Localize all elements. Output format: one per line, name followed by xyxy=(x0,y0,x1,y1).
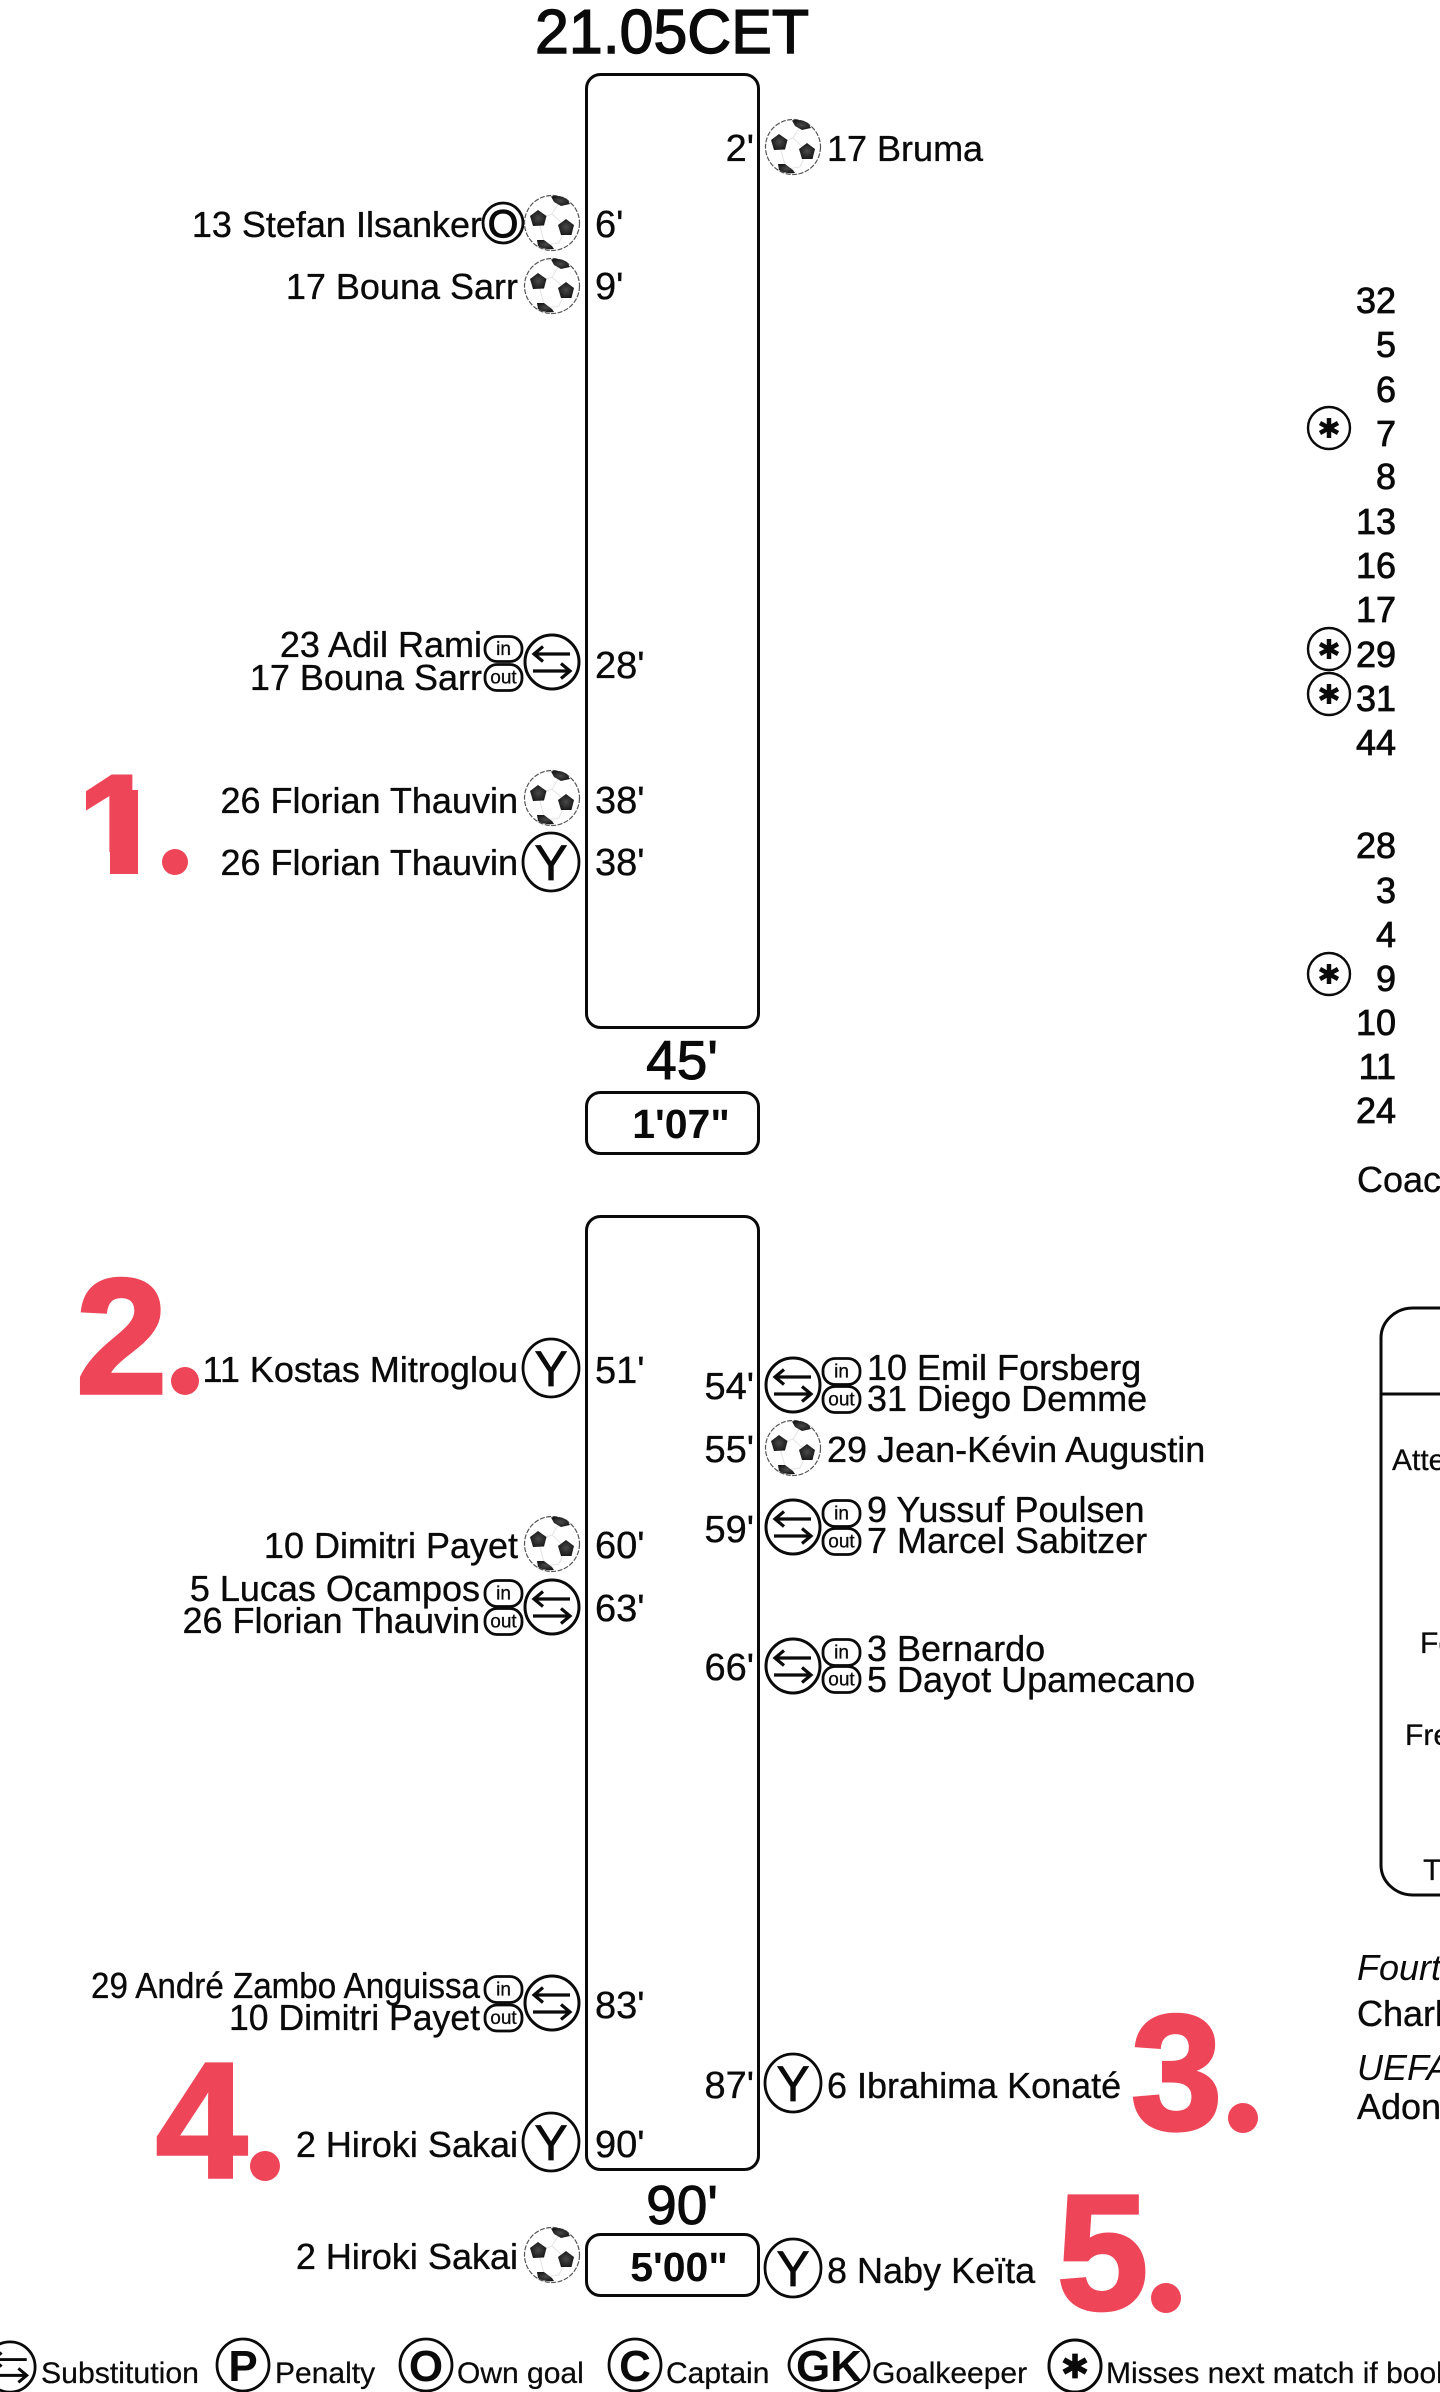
event: 28 minutes substitution xyxy=(250,624,645,698)
event: 6 minutes own goal Ilsanker: 6' xyxy=(595,204,623,246)
event: 66 minutes substitution: 3 Bernardo xyxy=(867,1628,1045,1669)
event: 66 minutes substitution: 5 Dayot Upamecano xyxy=(867,1659,1195,1700)
event: 55 minutes goal Augustin xyxy=(704,1420,1205,1476)
callout: red number 4: 4 xyxy=(156,2029,247,2212)
event: 28 minutes substitution: 23 Adil Rami xyxy=(280,624,482,665)
event: 54 minutes substitution xyxy=(704,1347,1147,1419)
legend: Own goal xyxy=(457,2357,584,2390)
event: 90 minutes yellow card Sakai xyxy=(296,2113,645,2171)
event: 60 minutes goal Payet: 10 Dimitri Payet xyxy=(264,1525,518,1566)
event: 87 minutes yellow card Konaté: 6 Ibrahima Konaté xyxy=(827,2065,1121,2106)
label: 90 minutes: 90' xyxy=(646,2174,718,2236)
text block: fourth official xyxy=(1357,1947,1440,2034)
panel: squad numbers, substitutes: 10 xyxy=(1356,1002,1396,1043)
legend: Goalkeeper xyxy=(872,2357,1027,2390)
event: 66 minutes substitution: 66' xyxy=(704,1647,754,1689)
panel: squad numbers, substitutes: 11 xyxy=(1359,1046,1396,1087)
panel: squad numbers, starters xyxy=(1356,280,1396,763)
event: 90 minutes yellow card Sakai: 90' xyxy=(595,2124,645,2166)
event: 63 minutes substitution: out xyxy=(490,1612,517,1632)
event: 87 minutes yellow card Konaté: Y xyxy=(776,2056,810,2112)
event: 2 minutes goal Bruma: 2' xyxy=(726,128,754,170)
event: 38 minutes goal Thauvin: 26 Florian Thauvin xyxy=(220,780,518,821)
event: 83 minutes substitution: out xyxy=(490,2008,517,2029)
event: 6 minutes own goal Ilsanker xyxy=(192,196,623,250)
event: 59 minutes substitution xyxy=(704,1489,1147,1561)
event: added time goal Sakai xyxy=(296,2228,580,2282)
event: 90 minutes yellow card Sakai: 2 Hiroki Sakai xyxy=(296,2124,518,2165)
event: 59 minutes substitution: 9 Yussuf Poulsen xyxy=(867,1489,1145,1530)
event: 38 minutes goal Thauvin xyxy=(220,770,645,826)
event: 87 minutes yellow card Konaté xyxy=(704,2054,1121,2112)
panel: first half added time: 1'07" xyxy=(632,1101,730,1147)
panel: squad numbers, starters: 17 xyxy=(1356,589,1396,630)
callout: red number 1: 1 xyxy=(78,746,157,905)
panel: squad numbers, substitutes: 24 xyxy=(1356,1090,1396,1131)
panel: squad numbers, starters: 16 xyxy=(1356,545,1396,586)
event: 54 minutes substitution: 54' xyxy=(704,1366,754,1408)
panel: squad numbers, starters: 32 xyxy=(1356,280,1396,321)
event: 63 minutes substitution: in xyxy=(496,1584,511,1604)
event: 60 minutes goal Payet: 60' xyxy=(595,1525,645,1567)
panel: squad numbers, starters: 5 xyxy=(1376,324,1396,365)
event: 38 minutes yellow card Thauvin xyxy=(220,833,645,891)
event: 83 minutes substitution: 29 André Zambo Anguissa xyxy=(91,1965,481,2006)
event: 28 minutes substitution: in xyxy=(496,639,511,660)
icon: misses next match, player 29 xyxy=(1308,628,1350,670)
event: 83 minutes substitution xyxy=(91,1965,645,2038)
panel: squad numbers, starters: 13 xyxy=(1356,501,1396,542)
event: 59 minutes substitution: 59' xyxy=(704,1509,754,1551)
panel: squad numbers, starters: 7 xyxy=(1376,413,1396,454)
text block: UEFA official xyxy=(1357,2047,1440,2127)
event: 9 minutes goal Sarr xyxy=(286,258,623,314)
event: added time yellow card Keïta xyxy=(765,2239,1036,2297)
event: 54 minutes substitution: 31 Diego Demme xyxy=(867,1378,1147,1419)
event: 83 minutes substitution: in xyxy=(496,1980,511,2000)
panel: second half timeline box xyxy=(586,1216,758,2170)
event: 28 minutes substitution: 28' xyxy=(595,645,645,687)
event: 6 minutes own goal Ilsanker: 13 Stefan Ilsanker xyxy=(192,204,482,245)
event: 54 minutes substitution: out xyxy=(828,1390,855,1410)
event: 9 minutes goal Sarr: 17 Bouna Sarr xyxy=(286,266,518,307)
panel: squad numbers, substitutes xyxy=(1356,825,1396,1131)
callout: red number 1 xyxy=(86,774,188,875)
event: 6 minutes own goal Ilsanker: O xyxy=(488,203,518,246)
event: 51 minutes yellow card Mitroglou: 11 Kostas Mitroglou xyxy=(202,1349,518,1390)
legend: O xyxy=(409,2342,443,2391)
event: 2 minutes goal Bruma xyxy=(726,120,984,174)
icon: misses next match, player 7 xyxy=(1308,407,1350,449)
icon: misses next match, player 9 xyxy=(1308,953,1350,995)
legend: Captain xyxy=(666,2357,769,2390)
legend: Substitution xyxy=(41,2357,199,2390)
event: 63 minutes substitution: 63' xyxy=(595,1588,645,1630)
event: 66 minutes substitution: in xyxy=(834,1642,849,1664)
panel: first half added time xyxy=(586,1092,758,1154)
event: 83 minutes substitution: 10 Dimitri Payet xyxy=(229,1997,480,2038)
event: 2 minutes goal Bruma: 17 Bruma xyxy=(827,128,984,169)
event: 38 minutes yellow card Thauvin: 38' xyxy=(595,842,645,884)
event: 63 minutes substitution: 5 Lucas Ocampos xyxy=(190,1568,480,1609)
panel: squad numbers, starters: 31 xyxy=(1356,678,1396,719)
legend: P xyxy=(228,2342,258,2391)
event: 83 minutes substitution: 83' xyxy=(595,1985,645,2027)
event: 28 minutes substitution: 17 Bouna Sarr xyxy=(250,657,482,698)
callout: red number 2: 2 xyxy=(76,1245,167,1428)
event: 51 minutes yellow card Mitroglou xyxy=(202,1339,645,1397)
callout: red number 3: 3 xyxy=(1131,1981,1222,2164)
event: added time yellow card Keïta: 8 Naby Keïta xyxy=(827,2250,1036,2291)
legend: GK xyxy=(796,2342,862,2391)
event: 54 minutes substitution: 10 Emil Forsberg xyxy=(867,1347,1141,1388)
event: 59 minutes substitution: 7 Marcel Sabitzer xyxy=(867,1520,1147,1561)
event: 38 minutes yellow card Thauvin: Y xyxy=(534,835,568,891)
event: added time goal Sakai: 2 Hiroki Sakai xyxy=(296,2236,518,2277)
legend xyxy=(0,2339,1440,2392)
event: 59 minutes substitution: in xyxy=(834,1504,849,1524)
event: 87 minutes yellow card Konaté: 87' xyxy=(704,2065,754,2107)
text block: UEFA official: Adon xyxy=(1357,2086,1440,2127)
event: 55 minutes goal Augustin: 55' xyxy=(704,1429,754,1471)
panel: squad numbers, starters: 29 xyxy=(1356,634,1396,675)
panel: squad numbers, substitutes: 3 xyxy=(1376,870,1396,911)
event: 90 minutes yellow card Sakai: Y xyxy=(534,2115,568,2171)
panel: squad numbers, starters: 6 xyxy=(1376,369,1396,410)
event: 38 minutes yellow card Thauvin: 26 Florian Thauvin xyxy=(220,842,518,883)
event: 28 minutes substitution: out xyxy=(490,668,517,688)
event: 55 minutes goal Augustin: 29 Jean-Kévin Augustin xyxy=(827,1429,1205,1470)
event: 59 minutes substitution: out xyxy=(828,1532,855,1552)
panel: match statistics table xyxy=(1381,1308,1440,1895)
label: 45 minutes: 45' xyxy=(646,1029,718,1091)
event: added time yellow card Keïta: Y xyxy=(776,2241,810,2297)
panel: second half added time xyxy=(586,2234,758,2296)
event: 63 minutes substitution xyxy=(182,1568,645,1641)
event: 60 minutes goal Payet xyxy=(264,1516,645,1572)
event: 63 minutes substitution: 26 Florian Thauvin xyxy=(182,1600,480,1641)
legend: Penalty xyxy=(275,2357,375,2390)
icon: misses next match, player 31 xyxy=(1308,673,1350,715)
panel: squad numbers, substitutes: 9 xyxy=(1376,958,1396,999)
panel: squad numbers, starters: 44 xyxy=(1356,722,1396,763)
legend: C xyxy=(619,2342,651,2391)
callout: red number 5: 5 xyxy=(1057,2161,1148,2344)
panel: squad numbers, substitutes: 28 xyxy=(1356,825,1396,866)
panel: second half added time: 5'00" xyxy=(630,2244,728,2290)
event: 38 minutes goal Thauvin: 38' xyxy=(595,780,645,822)
event: 51 minutes yellow card Mitroglou: 51' xyxy=(595,1350,645,1392)
panel: squad numbers, substitutes: 4 xyxy=(1376,914,1396,955)
event: 51 minutes yellow card Mitroglou: Y xyxy=(534,1341,568,1397)
panel: first half timeline box xyxy=(586,74,758,1028)
event: 66 minutes substitution: out xyxy=(828,1670,855,1690)
event: 9 minutes goal Sarr: 9' xyxy=(595,266,623,308)
event: 66 minutes substitution xyxy=(704,1628,1195,1700)
event: 54 minutes substitution: in xyxy=(834,1362,849,1382)
panel: squad numbers, starters: 8 xyxy=(1376,456,1396,497)
title: kick-off time: 21.05CET xyxy=(535,0,809,67)
